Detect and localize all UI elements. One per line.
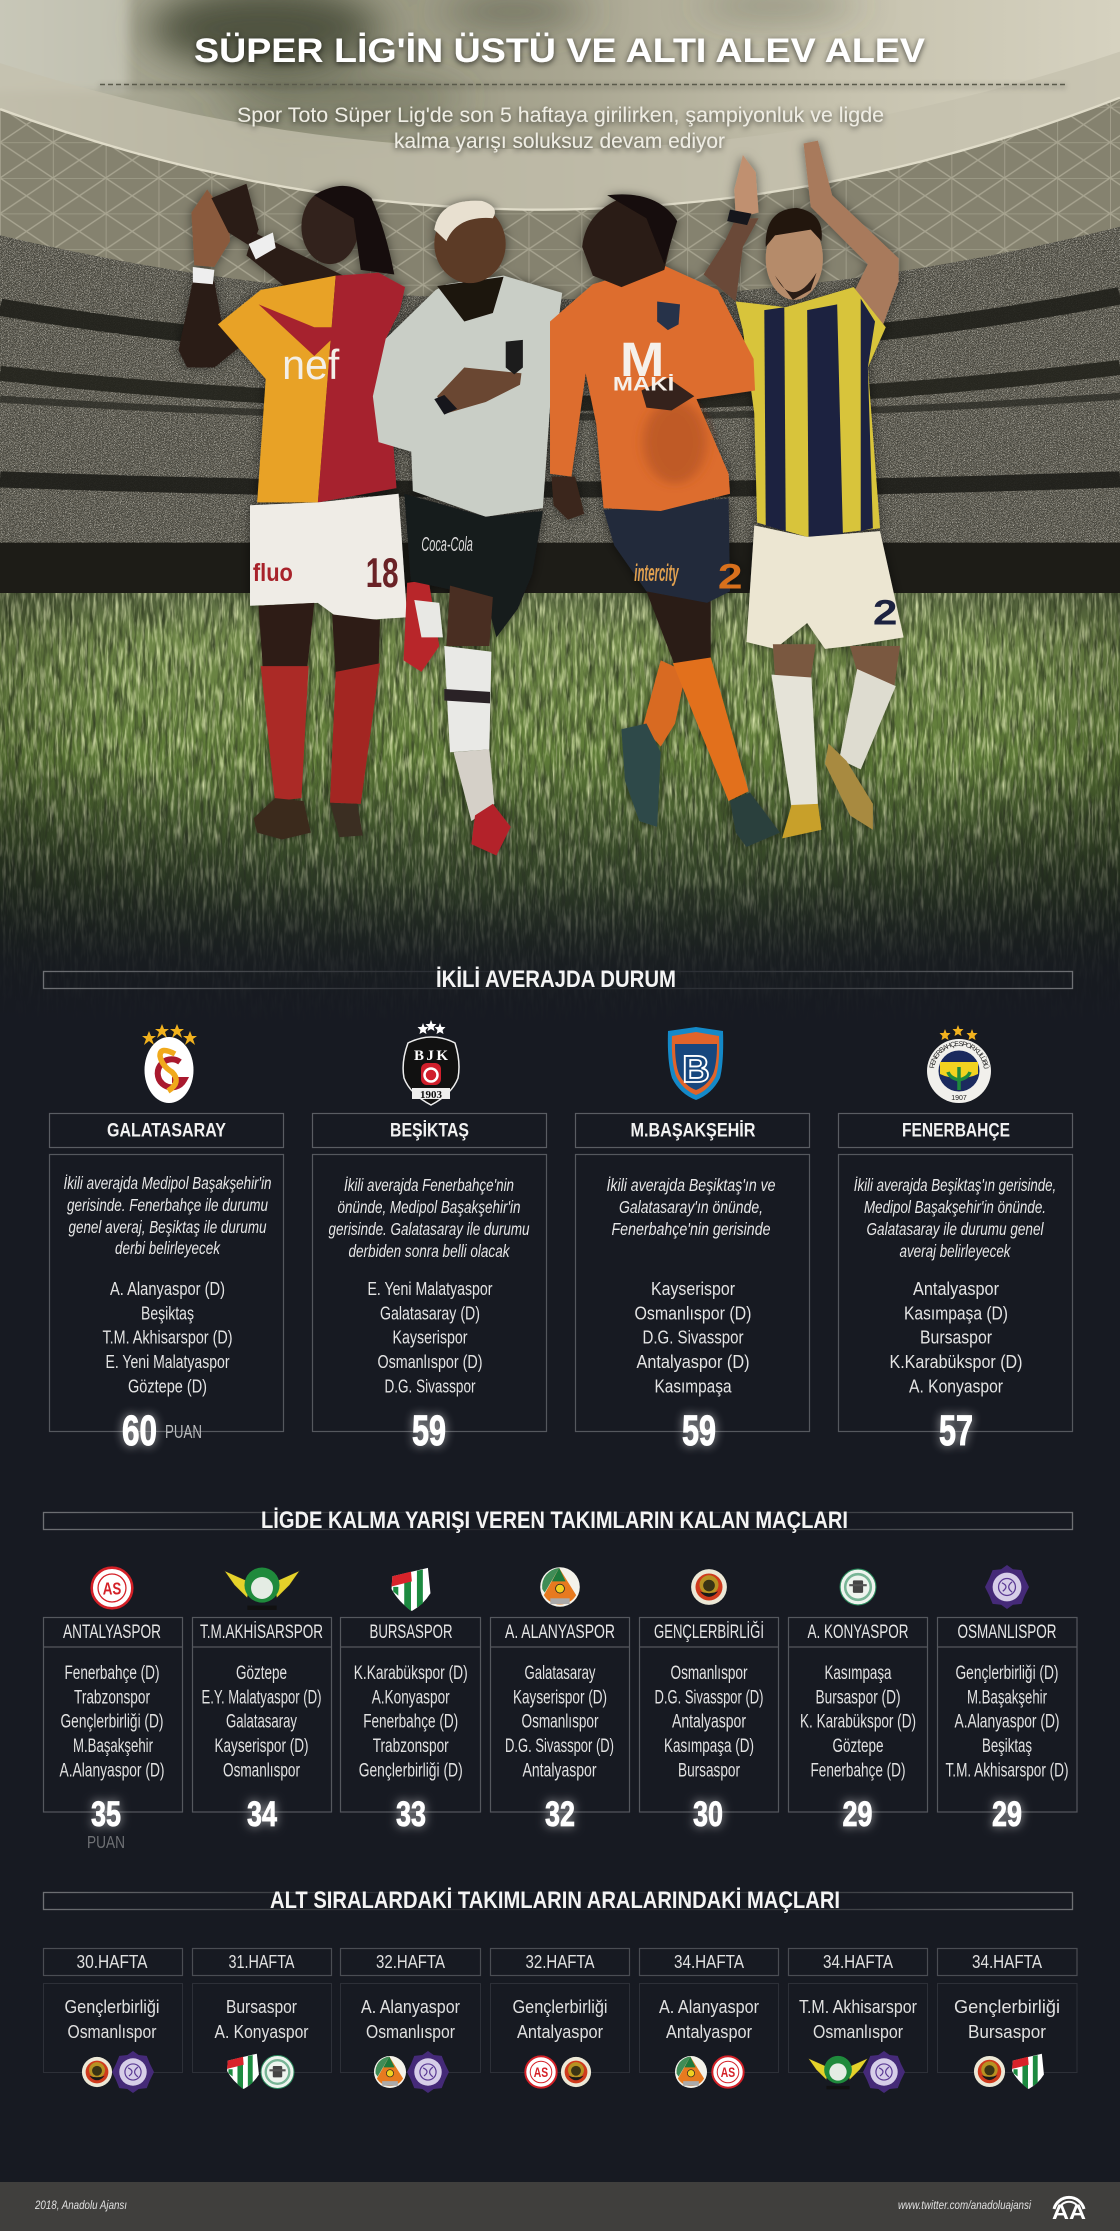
fixtures: Fenerbahçe (D) <box>64 1663 160 1684</box>
fixtures: Gençlerbirliği (D) <box>60 1712 164 1733</box>
panel: Antalyaspor <box>44 1568 182 1852</box>
title: SÜPER LİG'İN ÜSTÜ VE ALTI ALEV ALEV <box>194 32 925 70</box>
match card: week 34 second: T.M. Akhisarspor <box>799 1996 917 2017</box>
panel: Atiker Konyaspor <box>788 1569 928 1834</box>
team header: OSMANLISPOR <box>958 1621 1056 1643</box>
team name: FENERBAHÇE <box>902 1121 1010 1142</box>
team header: ANTALYASPOR <box>63 1621 161 1643</box>
copyright: 2018, Anadolu Ajansı <box>34 2200 127 2212</box>
team name <box>50 1114 284 1148</box>
average note <box>328 1175 530 1261</box>
fixtures: Beşiktaş <box>141 1302 194 1323</box>
fixtures: Osmanlıspor (D) <box>378 1351 482 1372</box>
match card: week 34 third: Bursaspor <box>968 2021 1046 2042</box>
fixtures: Bursaspor (D) <box>816 1687 900 1708</box>
match card: week 34 third: Gençlerbirliği <box>954 1996 1060 2017</box>
match card: week 31 <box>192 1948 332 2089</box>
player: Fenerbahçe <box>704 141 904 838</box>
average note: gerisinde. Fenerbahçe ile durumu <box>67 1195 268 1215</box>
player: Medipol Başakşehir: 2 <box>718 557 742 597</box>
average note: Fenerbahçe'nin gerisinde <box>612 1219 771 1239</box>
fixtures: Kayserispor (D) <box>214 1736 308 1757</box>
logo: Beşiktaş <box>403 1020 459 1105</box>
team header <box>788 1618 928 1812</box>
fixtures <box>890 1278 1022 1396</box>
match card: week 34 first: A. Alanyaspor <box>659 1996 759 2017</box>
match card: week 31: A. Konyaspor <box>214 2021 308 2042</box>
subtitle: kalma yarışı soluksuz devam ediyor <box>394 129 725 153</box>
average note: averaj belirleyecek <box>900 1241 1011 1261</box>
average note: derbiden sonra belli olacak <box>348 1241 510 1261</box>
logo: Beşiktaş: BJK <box>414 1048 448 1064</box>
team name <box>576 1114 810 1148</box>
average note <box>606 1175 776 1239</box>
fixtures <box>60 1663 164 1781</box>
fixtures: Galatasaray <box>524 1663 596 1684</box>
points: 32 <box>545 1794 575 1834</box>
fixtures: Galatasaray (D) <box>380 1302 480 1323</box>
match card: week 30: Osmanlıspor <box>68 2021 156 2042</box>
average note <box>854 1175 1056 1261</box>
fixtures: E. Yeni Malatyaspor <box>106 1351 230 1372</box>
logo: Akhisarspor <box>224 1568 300 1610</box>
player: Fenerbahçe: 2 <box>873 593 898 633</box>
panel: Osmanlıspor <box>938 1565 1077 1834</box>
match card: week 34 first: 34.HAFTA <box>674 1951 744 1972</box>
points: 60 <box>122 1407 157 1455</box>
fixtures: Trabzonspor <box>373 1736 449 1757</box>
player: Beşiktaş: Coca-Cola <box>421 533 473 556</box>
fixtures: E. Yeni Malatyaspor <box>368 1278 492 1299</box>
average note: genel averaj, Beşiktaş ile durumu <box>68 1217 267 1237</box>
fixtures: Kayserispor (D) <box>513 1687 607 1708</box>
logo: Başakşehir: B <box>682 1049 710 1091</box>
match card: week 34 third: 34.HAFTA <box>972 1951 1042 1972</box>
logo: Antalyaspor <box>92 1568 132 1608</box>
match card: week 32 second: Gençlerbirliği <box>512 1996 608 2017</box>
card body <box>838 1154 1072 1432</box>
card body <box>312 1154 546 1432</box>
match card: week 34 third <box>938 1948 1077 2089</box>
card body <box>50 1154 284 1432</box>
points: PUAN <box>165 1421 202 1442</box>
fixtures: Bursaspor <box>920 1327 992 1348</box>
points: 34 <box>247 1794 277 1834</box>
logo: Galatasaray <box>142 1024 197 1103</box>
fixtures: Trabzonspor <box>74 1687 150 1708</box>
logo: Beşiktaş: 1903 <box>420 1089 442 1101</box>
fixtures: Antalyaspor <box>522 1760 597 1781</box>
team header: GENÇLERBİRLİĞİ <box>654 1620 764 1643</box>
match card: week 31: Bursaspor <box>226 1996 297 2017</box>
fixtures: Kayserispor <box>651 1278 735 1299</box>
match card: week 32 second <box>490 1948 630 2088</box>
match card: week 34 second: 34.HAFTA <box>823 1951 893 1972</box>
match card: week 30: 30.HAFTA <box>76 1951 148 1972</box>
fixtures: Göztepe <box>832 1736 884 1757</box>
player: Galatasaray: 18 <box>366 550 399 596</box>
fixtures: Kayserispor <box>392 1327 468 1348</box>
average note: İkili averajda Medipol Başakşehir'in <box>64 1173 272 1193</box>
team header: BURSASPOR <box>370 1621 452 1643</box>
team header <box>938 1618 1077 1812</box>
team header <box>44 1618 182 1812</box>
team name: GALATASARAY <box>107 1121 226 1142</box>
points: 33 <box>396 1794 426 1834</box>
average note: gerisinde. Galatasaray ile durumu <box>328 1219 530 1239</box>
fixtures: Kasımpaşa (D) <box>664 1736 754 1757</box>
icon: Anadolu Agency logo: AA <box>1052 2201 1086 2224</box>
fixtures: K. Karabükspor (D) <box>800 1712 916 1733</box>
points <box>87 1794 125 1852</box>
points: 59 <box>412 1407 446 1455</box>
logo: Alanyaspor <box>540 1567 580 1607</box>
panel: T.M. Akhisarspor <box>192 1568 332 1834</box>
fixtures: D.G. Sivasspor <box>642 1327 744 1348</box>
section heading: ikili averajda durum <box>44 966 1072 993</box>
average note <box>64 1173 272 1258</box>
fixtures: A. Konyaspor <box>909 1375 1003 1396</box>
points: 59 <box>682 1407 716 1455</box>
fixtures: Kasımpaşa (D) <box>904 1302 1008 1323</box>
panel: Beşiktaş <box>312 1020 546 1455</box>
section heading: ikili averajda durum: İKİLİ AVERAJDA DURUM <box>436 966 676 993</box>
fixtures <box>800 1663 916 1781</box>
player: Galatasaray: nef <box>282 342 340 388</box>
fixtures: Fenerbahçe (D) <box>363 1712 458 1733</box>
points: 29 <box>842 1794 872 1834</box>
points: 29 <box>992 1794 1022 1834</box>
fixtures: Bursaspor <box>678 1760 740 1781</box>
team name <box>312 1114 546 1148</box>
panel: Fenerbahçe <box>838 1025 1074 1455</box>
logo: Osmanlıspor <box>985 1565 1029 1609</box>
fixtures: Kasımpaşa <box>654 1375 732 1396</box>
panel: Bursaspor <box>340 1568 480 1834</box>
player: Galatasaray <box>179 184 407 839</box>
match card: week 34 first: Antalyaspor <box>666 2021 752 2042</box>
match card: week 32: Osmanlıspor <box>366 2021 455 2042</box>
fixtures: Gençlerbirliği (D) <box>359 1760 463 1781</box>
fixtures: A.Alanyaspor (D) <box>60 1760 164 1781</box>
team header <box>340 1618 480 1812</box>
fixtures <box>654 1663 764 1781</box>
logo: Bursaspor <box>392 1568 430 1611</box>
subtitle: Spor Toto Süper Lig'de son 5 haftaya girilirken, şampiyonluk ve ligde <box>237 103 884 127</box>
fixtures: Fenerbahçe (D) <box>810 1760 906 1781</box>
logo: Başakşehir <box>668 1027 723 1100</box>
logo: Fenerbahçe <box>927 1025 991 1103</box>
fixtures: T.M. Akhisarspor (D) <box>946 1760 1068 1781</box>
team name: M.BAŞAKŞEHİR <box>630 1121 756 1142</box>
fixtures: T.M. Akhisarspor (D) <box>102 1327 232 1348</box>
fixtures: M.Başakşehir <box>73 1736 153 1757</box>
fixtures: K.Karabükspor (D) <box>354 1663 468 1684</box>
player: Medipol Başakşehir <box>550 194 780 847</box>
match card: week 32 <box>340 1948 480 2093</box>
section heading: alt sıralardaki takımlar: ALT SIRALARDAKİ TAKIMLARIN ARALARINDAKİ MAÇLARI <box>270 1887 840 1914</box>
match card: week 31: 31.HAFTA <box>228 1951 295 1972</box>
fixtures <box>634 1278 752 1396</box>
player: Beşiktaş <box>373 201 562 856</box>
match card: week 32: A. Alanyaspor <box>361 1996 460 2017</box>
fixtures: D.G. Sivasspor (D) <box>505 1736 614 1757</box>
logo: Gençlerbirliği <box>691 1569 727 1605</box>
player: Medipol Başakşehir: MAKİ <box>613 373 674 395</box>
team header: A. ALANYASPOR <box>505 1621 615 1643</box>
fixtures <box>202 1663 322 1781</box>
logo: Konyaspor <box>840 1569 876 1605</box>
player: Medipol Başakşehir: M <box>620 333 664 387</box>
twitter link: www.twitter.com/anadoluajansi <box>898 2200 1031 2212</box>
panel: Alanyaspor <box>490 1567 630 1834</box>
panel: Medipol Başakşehir <box>576 1027 810 1455</box>
fixtures: Antalyaspor (D) <box>636 1351 750 1372</box>
average note: İkili averajda Beşiktaş'ın ve <box>606 1175 776 1195</box>
fixtures: D.G. Sivasspor <box>384 1375 476 1396</box>
fixtures: Galatasaray <box>226 1712 297 1733</box>
fixtures <box>946 1663 1068 1781</box>
fixtures: Kasımpaşa <box>824 1663 892 1684</box>
team header <box>192 1618 332 1812</box>
match card: week 30 <box>44 1948 182 2093</box>
panel: Gençlerbirliği <box>640 1569 778 1834</box>
fixtures: A. Alanyaspor (D) <box>110 1278 225 1299</box>
average note: İkili averajda Fenerbahçe'nin <box>344 1175 514 1195</box>
fixtures: Göztepe <box>236 1663 287 1684</box>
stadium background <box>0 0 1120 597</box>
fixtures: Göztepe (D) <box>128 1375 207 1396</box>
fixtures: Osmanlıspor <box>223 1760 300 1781</box>
section heading: ligde kalma yarışı: LİGDE KALMA YARIŞI VEREN TAKIMLARIN KALAN MAÇLARI <box>261 1507 848 1534</box>
fixtures: Antalyaspor <box>913 1278 999 1299</box>
average note: önünde, Medipol Başakşehir'in <box>338 1197 520 1217</box>
fixtures <box>354 1663 468 1781</box>
fixtures: Osmanlıspor (D) <box>634 1302 752 1323</box>
fixtures: D.G. Sivasspor (D) <box>654 1687 764 1708</box>
section heading: alt sıralardaki takımlar <box>44 1887 1072 1914</box>
team header <box>640 1618 778 1812</box>
match card: week 34 second: Osmanlıspor <box>813 2021 903 2042</box>
match card: week 30: Gençlerbirliği <box>64 1996 160 2017</box>
fixtures <box>505 1663 614 1781</box>
average note: İkili averajda Beşiktaş'ın gerisinde, <box>854 1175 1056 1195</box>
subtitle <box>100 84 1068 153</box>
fixtures: Beşiktaş <box>982 1736 1032 1757</box>
team header: T.M.AKHİSARSPOR <box>200 1620 323 1643</box>
fixtures: Osmanlıspor <box>522 1712 599 1733</box>
points: 30 <box>693 1794 723 1834</box>
match card: week 34 first <box>640 1948 778 2088</box>
fixtures: M.Başakşehir <box>967 1687 1047 1708</box>
players <box>179 141 904 856</box>
fixtures: A.Alanyaspor (D) <box>954 1712 1060 1733</box>
fixtures: Osmanlıspor <box>670 1663 748 1684</box>
panel: Galatasaray <box>50 1024 284 1455</box>
logo: Fenerbahçe: FENERBAHÇE SPOR KULÜBÜ <box>929 1041 990 1068</box>
hero photo: stadium and players <box>0 0 1120 1045</box>
footer <box>0 2182 1120 2231</box>
points: 35 <box>91 1794 121 1834</box>
match card: week 34 second <box>788 1948 928 2093</box>
average note: Galatasaray ile durumu genel <box>866 1219 1044 1239</box>
match card: week 32 second: 32.HAFTA <box>526 1951 595 1972</box>
fixtures: K.Karabükspor (D) <box>890 1351 1022 1372</box>
fixtures: Gençlerbirliği (D) <box>956 1663 1058 1684</box>
match card: week 32: 32.HAFTA <box>376 1951 445 1972</box>
team header <box>490 1618 630 1812</box>
points: PUAN <box>87 1832 125 1852</box>
fixtures <box>102 1278 232 1396</box>
player: Medipol Başakşehir: intercity <box>634 559 679 586</box>
grass field <box>0 593 1120 1045</box>
points: 57 <box>939 1407 973 1455</box>
section heading: ligde kalma yarışı <box>44 1507 1072 1534</box>
average note: Medipol Başakşehir'in önünde. <box>864 1197 1046 1217</box>
fixtures <box>368 1278 492 1396</box>
fixtures: E.Y. Malatyaspor (D) <box>202 1687 322 1708</box>
team name <box>838 1114 1072 1148</box>
player: Galatasaray: fluo <box>253 559 293 587</box>
match card: week 32 second: Antalyaspor <box>517 2021 603 2042</box>
fixtures: A.Konyaspor <box>372 1687 450 1708</box>
team name: BEŞİKTAŞ <box>390 1121 469 1142</box>
points <box>122 1407 202 1455</box>
average note: derbi belirleyecek <box>115 1238 221 1258</box>
average note: Galatasaray'ın önünde, <box>619 1197 763 1217</box>
team header: A. KONYASPOR <box>808 1621 908 1643</box>
fixtures: Antalyaspor <box>672 1712 746 1733</box>
logo: Fenerbahçe: 1907 <box>951 1095 967 1102</box>
card body <box>576 1154 810 1432</box>
